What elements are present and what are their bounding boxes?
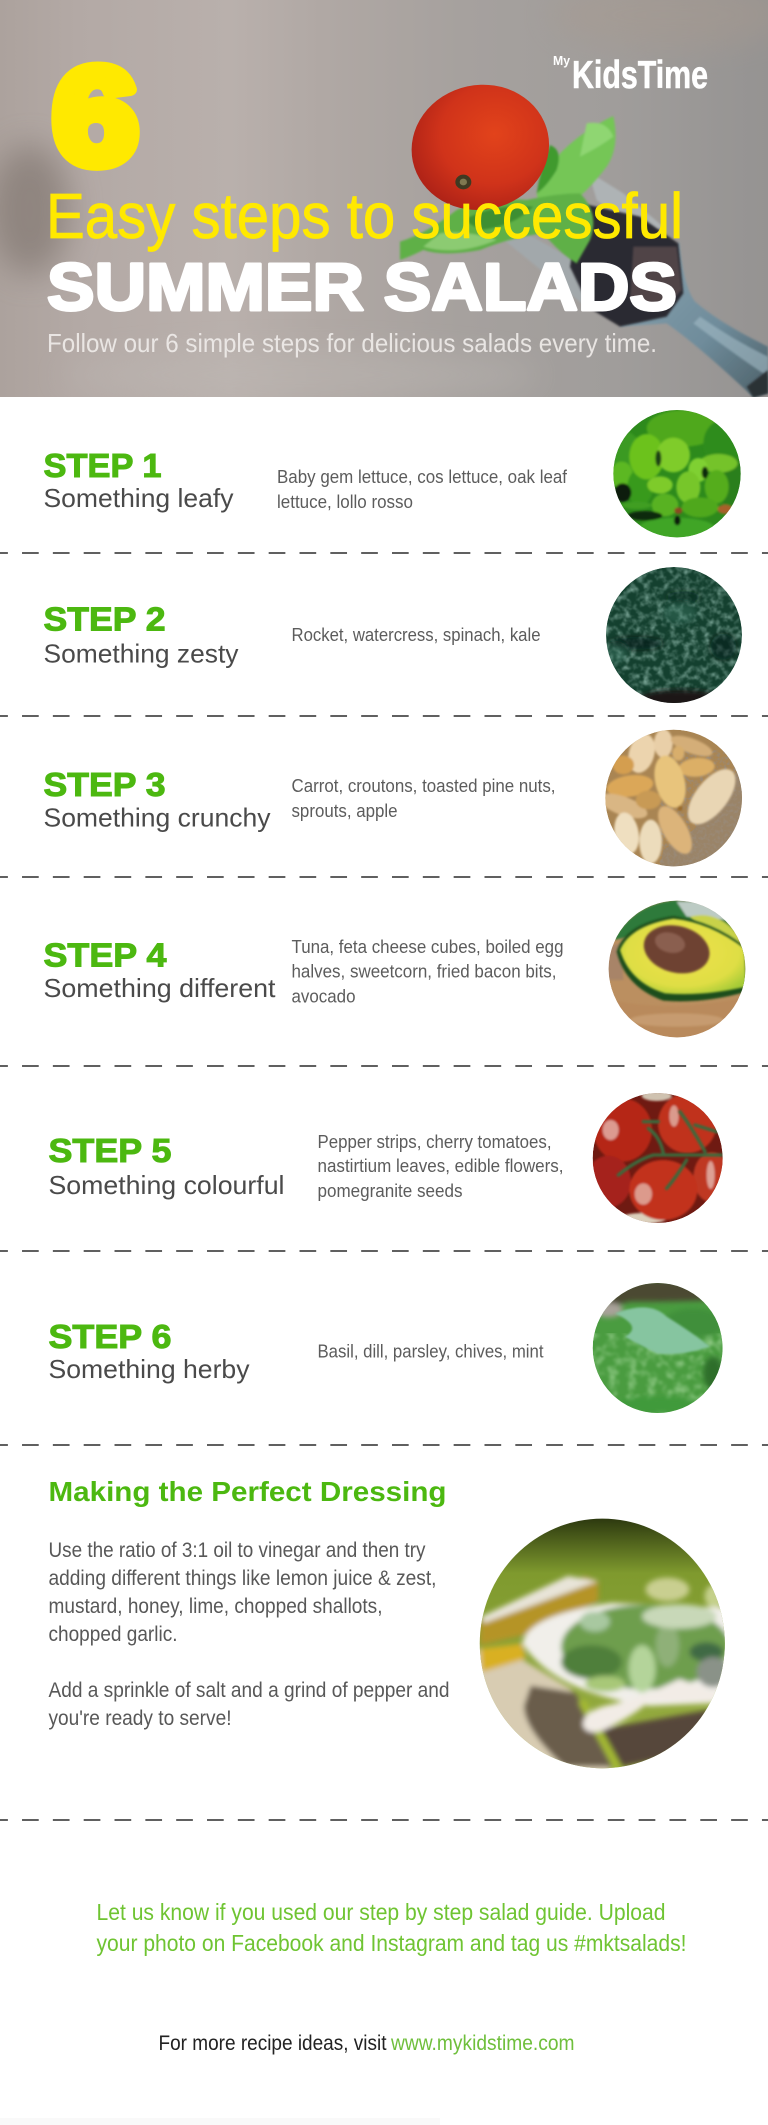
step 3 description: sprouts, apple — [292, 801, 398, 821]
dressing text: Add a sprinkle of salt and a grind of pepper and — [48, 1679, 450, 1702]
footer link line: www.mykidstime.com — [390, 2032, 574, 2055]
heading: summer salads: SUMMER SALADS — [47, 250, 677, 325]
step 1 subtitle: Something leafy — [44, 483, 233, 513]
intro text: Follow our 6 simple steps for delicious salads every time. — [47, 328, 657, 358]
step 4 subtitle: Something different — [44, 973, 276, 1003]
fork head — [570, 203, 683, 327]
step 3 description — [292, 776, 556, 821]
step 1 description: lettuce, lollo rosso — [277, 492, 413, 512]
call to action text — [96, 1899, 686, 1956]
step 4 description: halves, sweetcorn, fried bacon bits, — [292, 962, 556, 982]
step 2 heading: STEP 2 — [44, 600, 166, 638]
step 6 heading: STEP 6 — [48, 1318, 172, 1355]
step 1 heading: STEP 1 — [44, 447, 162, 484]
panel: hero header — [0, 0, 768, 400]
step 2 description: Rocket, watercress, spinach, kale — [292, 625, 540, 645]
step 4 description: Tuna, feta cheese cubes, boiled egg — [292, 937, 564, 957]
dressing heading: Making the Perfect Dressing — [48, 1476, 446, 1507]
dressing text: Use the ratio of 3:1 oil to vinegar and then try — [48, 1539, 426, 1562]
step 4 description: avocado — [292, 986, 356, 1006]
panel: dressing — [48, 1476, 733, 1773]
photo: tomatoes on the vine — [592, 1093, 723, 1223]
photo: kale — [606, 567, 742, 710]
dressing text: chopped garlic. — [48, 1623, 178, 1646]
fork tines — [500, 172, 663, 303]
step 5 heading: STEP 5 — [48, 1132, 172, 1169]
step 1 description — [277, 467, 568, 512]
step 3 heading: STEP 3 — [44, 766, 166, 803]
dressing text: adding different things like lemon juice & zest, — [48, 1567, 436, 1590]
logo: MyKidsTime — [554, 56, 708, 89]
divider 2 — [0, 715, 768, 717]
footer link line: For more recipe ideas, visit — [158, 2032, 387, 2055]
fork handle — [620, 242, 768, 397]
step 6 subtitle: Something herby — [48, 1354, 250, 1384]
step 5 description — [318, 1132, 564, 1201]
photo: salad bowl — [477, 1517, 733, 1773]
dressing text: you're ready to serve! — [48, 1707, 232, 1730]
photo: lettuce — [610, 410, 745, 539]
panel: step 2 — [44, 567, 742, 710]
panel: step 3 — [44, 729, 744, 867]
dressing text — [48, 1539, 450, 1730]
panel: step 6 — [48, 1280, 727, 1413]
panel: step 5 — [48, 1091, 730, 1224]
photo: pine nuts — [596, 729, 744, 867]
step 1 description: Baby gem lettuce, cos lettuce, oak leaf — [277, 467, 568, 487]
step 6 description: Basil, dill, parsley, chives, mint — [318, 1342, 544, 1362]
step 2 subtitle: Something zesty — [44, 638, 238, 668]
panel: step 4 — [44, 900, 747, 1040]
divider 6 — [0, 1444, 768, 1446]
step 5 description: Pepper strips, cherry tomatoes, — [318, 1132, 552, 1152]
footer link line — [158, 2032, 574, 2055]
hero photo background — [0, 0, 768, 400]
photo: fork with tomato and lettuce — [400, 72, 768, 397]
call to action text: your photo on Facebook and Instagram and tag us #mktsalads! — [96, 1930, 686, 1956]
step 5 subtitle: Something colourful — [48, 1170, 284, 1200]
call to action text: Let us know if you used our step by step salad guide. Upload — [96, 1899, 666, 1925]
divider 7 — [0, 1819, 768, 1821]
lettuce leaves — [400, 116, 616, 263]
tomato — [412, 84, 550, 210]
divider 5 — [0, 1250, 768, 1252]
logo: MyKidsTime: My — [553, 53, 571, 68]
heading: easy steps: Easy steps to successful — [46, 180, 683, 252]
panel: step 1 — [44, 410, 745, 539]
step 3 description: Carrot, croutons, toasted pine nuts, — [292, 776, 556, 796]
step 5 description: pomegranite seeds — [318, 1181, 462, 1201]
divider 4 — [0, 1065, 768, 1067]
step 4 heading: STEP 4 — [44, 936, 167, 974]
photo: herb — [590, 1280, 727, 1413]
divider 3 — [0, 876, 768, 878]
logo: MyKidsTime: KidsTime — [572, 54, 708, 97]
step 5 description: nastirtium leaves, edible flowers, — [318, 1156, 564, 1176]
divider 1 — [0, 552, 768, 554]
dressing text: mustard, honey, lime, chopped shallots, — [48, 1595, 382, 1618]
photo: avocado — [607, 900, 747, 1040]
step 4 description — [292, 937, 564, 1006]
big number 6: 6 — [53, 40, 138, 192]
step 3 subtitle: Something crunchy — [44, 802, 270, 832]
